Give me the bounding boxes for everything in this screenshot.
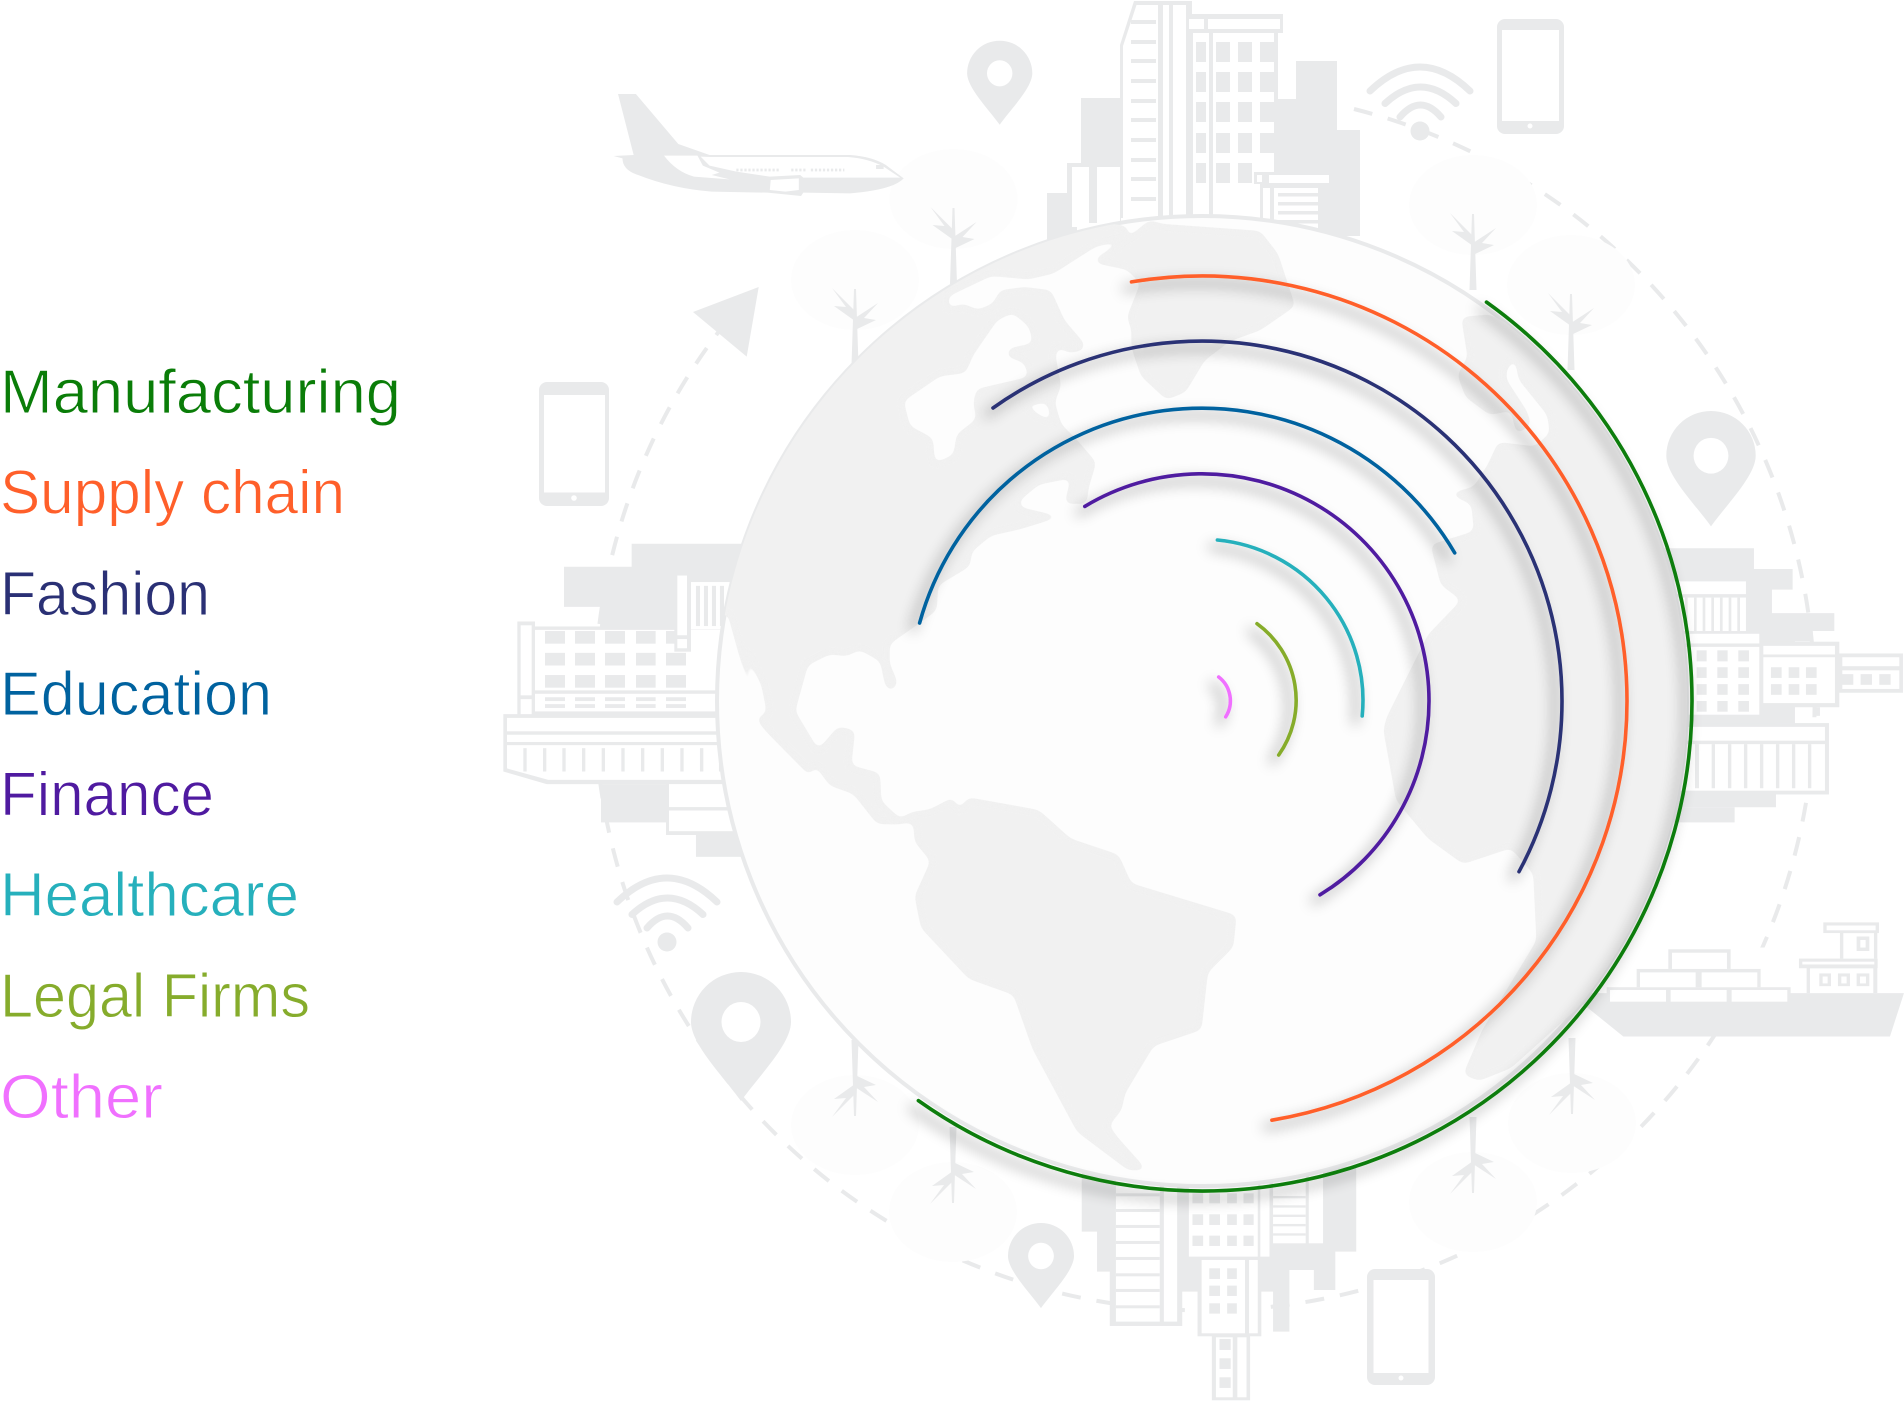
icon: location pin bottom left	[691, 972, 791, 1101]
icon: wifi bottom left	[617, 878, 717, 952]
tree: bottom right small	[1508, 1038, 1636, 1173]
land: Greenland	[1096, 220, 1295, 400]
legend: legal firms: Legal Firms	[0, 962, 310, 1031]
icon: location pin right	[1666, 411, 1756, 526]
legend: healthcare: Healthcare	[0, 861, 299, 930]
legend: education: Education	[0, 660, 272, 729]
icon: tablet left	[539, 382, 609, 506]
land: Africa and Europe	[1383, 314, 1740, 1081]
icon: tablet bottom	[1367, 1269, 1435, 1385]
icon: arrowhead	[693, 287, 759, 357]
arc: manufacturing	[918, 302, 1692, 1191]
legend: finance: Finance	[0, 760, 214, 830]
arc: healthcare	[1217, 540, 1363, 716]
trees	[791, 149, 1636, 1262]
arc: finance	[1085, 474, 1429, 895]
tree: bottom left large	[889, 1127, 1017, 1262]
dashed orbit	[595, 109, 1815, 1310]
arc: fashion	[993, 341, 1562, 872]
tree: top right small	[1507, 235, 1635, 370]
legend: supply chain: Supply chain	[0, 458, 345, 528]
tree: top right large	[1409, 155, 1537, 290]
icon: airplane	[614, 94, 904, 196]
icon: wifi top right	[1370, 67, 1470, 140]
tree: top left large	[890, 149, 1018, 284]
city: right	[1633, 548, 1903, 822]
arc: legal firms	[1257, 624, 1296, 755]
arc: other	[1219, 677, 1230, 717]
land: the Americas	[701, 201, 1237, 1170]
ship	[1568, 922, 1904, 1037]
legend: manufacturing: Manufacturing	[0, 358, 401, 427]
tree: bottom right large	[1409, 1117, 1537, 1252]
arc: education	[920, 408, 1455, 623]
legend	[0, 358, 401, 1132]
legend: fashion: Fashion	[0, 560, 210, 629]
arc: supply chain	[1132, 276, 1627, 1120]
icon: location pin top	[967, 41, 1032, 125]
city: top	[1047, 1, 1360, 243]
tree: top left small	[791, 230, 919, 365]
tree: bottom left small	[791, 1040, 919, 1175]
globe	[717, 216, 1687, 1186]
city: bottom	[1082, 1167, 1356, 1400]
icon: location pin bottom	[1008, 1223, 1074, 1308]
globe land masses	[701, 201, 1740, 1170]
city: left	[503, 544, 757, 857]
arcs	[918, 276, 1692, 1191]
icon: tablet top right	[1497, 19, 1564, 134]
legend: other: Other	[0, 1063, 163, 1132]
